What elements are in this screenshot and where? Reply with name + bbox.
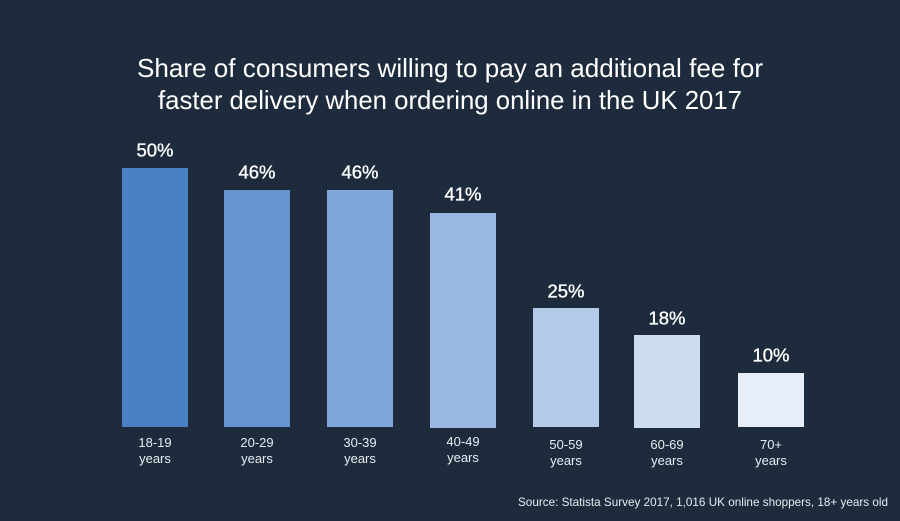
bar: 18-19 years, 50%: 18-19 <box>138 435 172 450</box>
title: Share of consumers willing to pay an additional fee for <box>137 53 763 83</box>
bar: 60-69 years, 18%: 18% <box>648 308 686 328</box>
bar: 50-59 years, 25%: 50-59 <box>549 437 583 452</box>
bar: 18-19 years, 50% <box>122 140 188 466</box>
bar: 40-49 years, 41%: 41% <box>444 184 482 204</box>
title <box>137 53 763 115</box>
bar: 70+ years, 10% <box>738 346 804 468</box>
bar: 20-29 years, 46%: years <box>241 451 273 466</box>
bar: 20-29 years, 46%: 46% <box>238 162 276 182</box>
bar: 70+ years, 10%: 10% <box>752 346 790 366</box>
bar: 40-49 years, 41%: years <box>447 450 479 465</box>
bar: 40-49 years, 41% <box>430 184 496 465</box>
bar: 18-19 years, 50%: 50% <box>136 140 174 160</box>
bar: 60-69 years, 18%: years <box>651 453 683 468</box>
bar: 30-39 years, 46%: years <box>344 451 376 466</box>
bar: 50-59 years, 25%: years <box>550 453 582 468</box>
bar: 30-39 years, 46%: 46% <box>342 162 378 182</box>
bar: 30-39 years, 46%: 30-39 <box>343 435 377 450</box>
source note: Source: Statista Survey 2017, 1,016 UK online shoppers, 18+ years old <box>518 495 888 509</box>
bar: 70+ years, 10%: years <box>755 453 787 468</box>
title: faster delivery when ordering online in the UK 2017 <box>158 85 742 115</box>
bar: 18-19 years, 50%: years <box>139 451 171 466</box>
bar: 70+ years, 10%: 70+ <box>760 437 782 452</box>
bar: 40-49 years, 41%: 40-49 <box>446 434 480 449</box>
bar: 60-69 years, 18% <box>634 308 700 468</box>
bar: 60-69 years, 18%: 60-69 <box>650 437 684 452</box>
bar: 20-29 years, 46% <box>224 162 290 466</box>
bar: 50-59 years, 25%: 25% <box>548 282 584 302</box>
bar: 20-29 years, 46%: 20-29 <box>240 435 274 450</box>
bar: 30-39 years, 46% <box>327 162 393 466</box>
bar: 50-59 years, 25% <box>533 282 599 468</box>
bar chart <box>122 140 804 468</box>
